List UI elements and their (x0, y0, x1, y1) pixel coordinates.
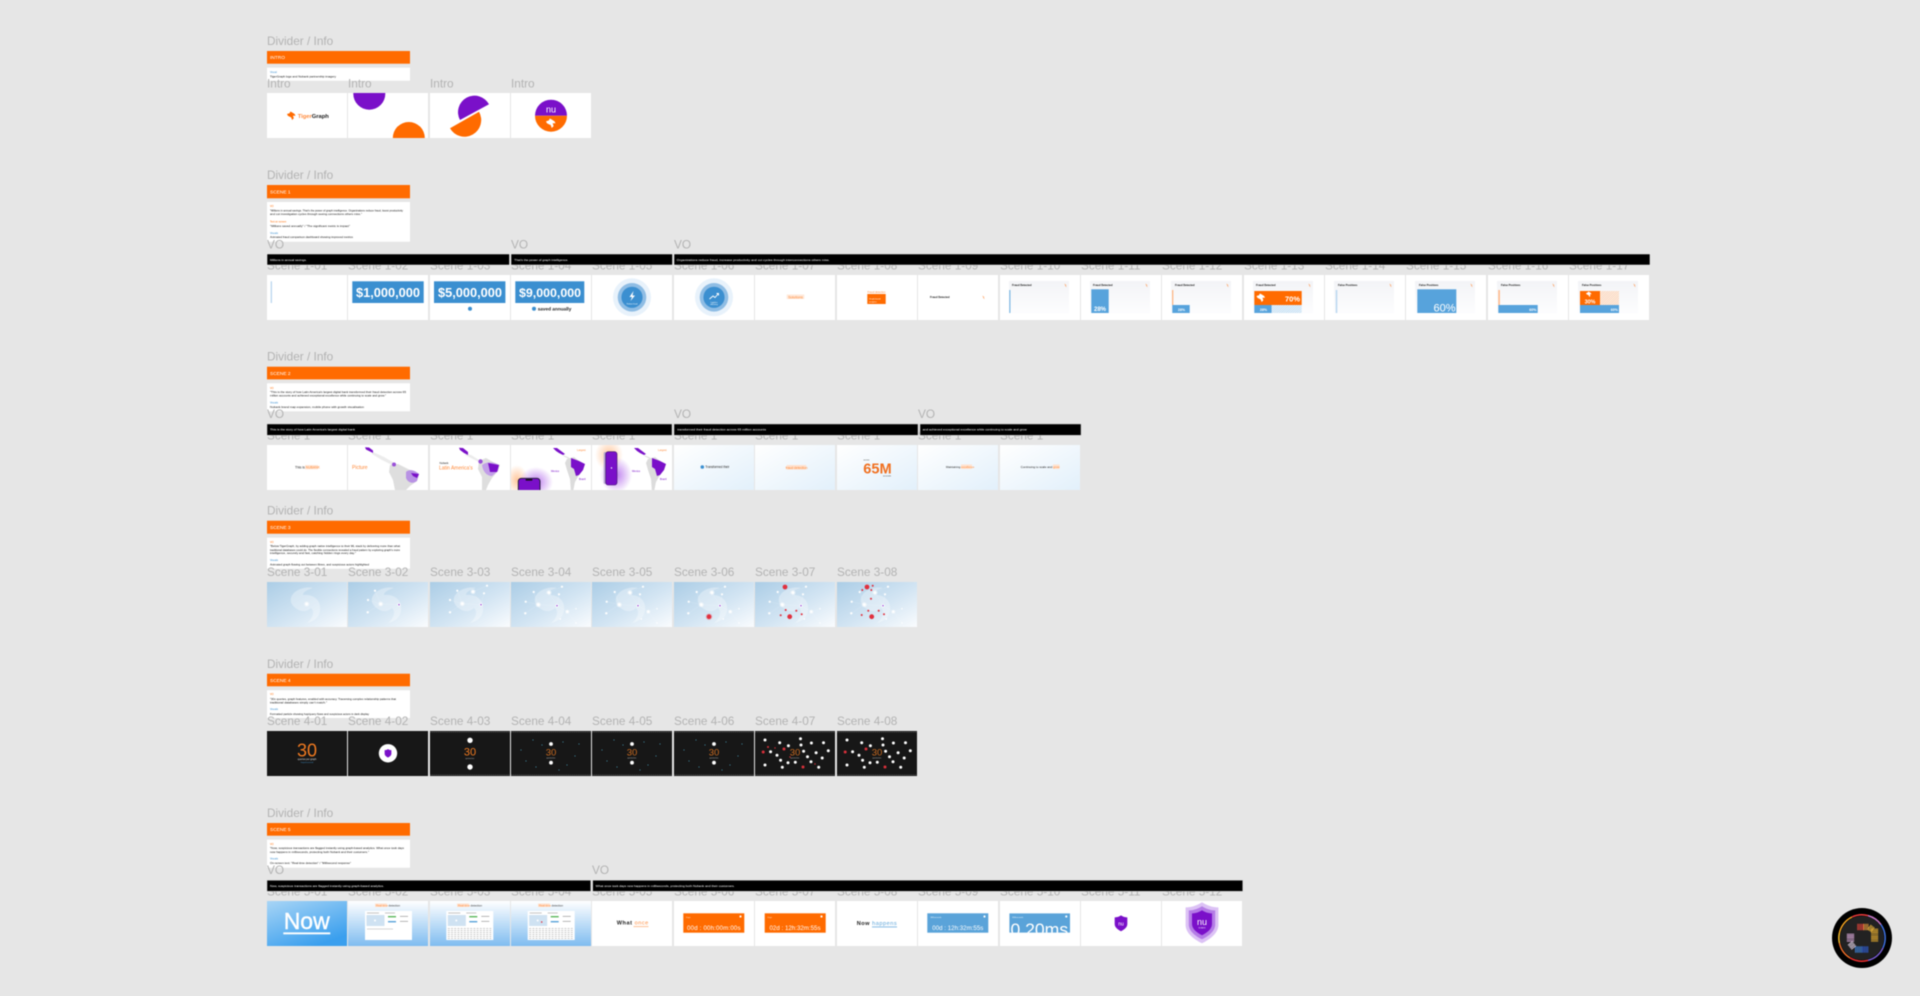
heading: divider info scene 4: Divider / Info (267, 657, 334, 671)
section: scene 3 (267, 504, 917, 627)
frame: TigerGraph logo: TigerGraph (298, 114, 329, 120)
frame 2-02: map closeup: Picture (352, 465, 368, 471)
frame 1-07: orange word: Solutions (788, 295, 803, 299)
frame 4-05: 30 with teal particles: queries/sec (627, 758, 637, 760)
frame: nu badge (511, 93, 591, 138)
info card: scene 1: VO (270, 205, 274, 208)
frame 4-03: 30 with two large nodes (430, 731, 510, 776)
frame 1-09: fraud detected heading: Fraud Detected (930, 295, 950, 299)
frame 1-11: chart 28 percent tall: Fraud Detected (1093, 283, 1113, 287)
frame 2-10: continuing to scale: Continuing to scale and grow (1021, 465, 1061, 469)
VO bar: flagged instantly: Now, suspicious transactions are flagged instantly using graph-based analytics. (270, 884, 384, 888)
frame 2-05: map phone center: Largest (658, 448, 667, 452)
frame 1-03: five million: $5,000,000 (438, 285, 502, 300)
VO labels: scene 2: VO (918, 407, 935, 421)
frame 1-12: chart 28 percent short: 28% (1178, 308, 1186, 312)
info card: scene 3 (267, 538, 410, 569)
frame 1-13: chart 70 percent: 70% (1285, 295, 1300, 304)
frame 5-04: real-time dashboard with table (511, 901, 591, 946)
frame 5-07: timer orange: Days (768, 917, 772, 919)
frame 2-06: transformed text (674, 445, 754, 490)
section: intro (267, 34, 591, 154)
frame 5-01: now (267, 901, 347, 946)
frame labels: scene 1: Scene 1-06 (674, 258, 735, 272)
VO bar: graph intelligence (511, 254, 672, 265)
frame 2-08: 65M (837, 445, 917, 490)
info card: scene 1: "Millions in annual savings. That's the power of graph intelligence. Organizations reduce fraud, boost productivity (270, 210, 404, 212)
frame labels: intro: Intro (430, 76, 454, 90)
banner: scene 5 (267, 823, 410, 836)
frame 1-16: chart 60 percent short: False Positives (1501, 283, 1521, 287)
frame 5-09: timer blue: 00d : 12h:32m:55s (932, 925, 983, 932)
frame labels: scene 2: Scene 1 (918, 428, 961, 442)
frame 3-05: full network (592, 582, 672, 627)
info card: scene 3: intelligence, securely and fast, catching hidden rings every day." (270, 552, 356, 555)
frame labels: scene 3: Scene 3-01 (267, 565, 327, 579)
frame 5-03: real-time dashboard with table (430, 901, 510, 946)
frame labels: intro: Intro (511, 76, 535, 90)
info card: scene 3: Visuals (270, 559, 279, 562)
VO bar: excellence: and achieved exceptional excellence while continuing to scale and grow (923, 428, 1027, 432)
frame labels: scene 4: Scene 4-02 (348, 714, 408, 728)
frame labels: scene 2: Scene 1 (592, 428, 635, 442)
heading: divider info scene 2: Divider / Info (267, 350, 334, 364)
info card: scene 4: VO (270, 693, 274, 696)
frame labels: scene 1: Scene 1-12 (1162, 258, 1222, 272)
info card: scene 4: Visuals (270, 708, 279, 711)
frame labels: scene 5: Scene 5-01 (267, 884, 327, 898)
info card: scene 3: traditional databases could do. The flexible connections revealed a fraud pattern by exploring graph's more (270, 549, 401, 552)
info card: scene 5: Visuals (270, 858, 279, 860)
frame 2-01: this is nubank (267, 445, 347, 490)
frame 1-04: nine million (511, 275, 591, 320)
VO bar: graph intelligence: That's the power of graph intelligence. (514, 258, 569, 262)
frame 4-03: 30 with two large nodes: 30 (464, 746, 476, 758)
frame labels: scene 2: Scene 1 (837, 428, 880, 442)
frame labels: scene 2: Scene 1 (430, 428, 473, 442)
frame 2-04: map phone rising: Largest (577, 448, 586, 452)
frame 1-04: nine million: saved annually (538, 306, 572, 311)
info card: scene 1: Text on screen (270, 221, 287, 224)
VO bar: flagged instantly (267, 880, 591, 891)
info card: scene 2 (267, 383, 410, 411)
frame 2-03: map latin america (430, 445, 510, 490)
frame labels: scene 1: Scene 1-15 (1406, 258, 1467, 272)
frame 5-08: now happens (837, 901, 917, 946)
info card: scene 5: On-screen text: "Real-time detection" / "Millisecond response" (270, 862, 351, 865)
VO bar: savings (267, 254, 510, 265)
frame labels: scene 1 (267, 258, 1629, 272)
frame labels: scene 3: Scene 3-07 (755, 565, 815, 579)
frame 2-02: map closeup (348, 445, 428, 490)
frame 1-01: empty bar (267, 275, 347, 320)
frame 4-01: 30 queries: queries per graph (298, 758, 317, 761)
VO bar: fraud detection: transformed their fraud detection across 65 million accounts (677, 428, 767, 432)
frame labels: scene 4: Scene 4-01 (267, 714, 327, 728)
frame 4-04: 30 with teal particles: 30 (546, 748, 556, 758)
frame labels: scene 1: Scene 1-10 (1000, 258, 1061, 272)
info card: scene 4 (267, 690, 410, 718)
info card: scene 2: "This is the story of how Latin America's largest digital bank transformed their fraud detection across 65 (270, 391, 407, 394)
frame labels: scene 3: Scene 3-03 (430, 565, 491, 579)
frame 1-06: growth icon rings: efficiency (710, 304, 718, 306)
frame labels: scene 5: Scene 5-07 (755, 884, 815, 898)
frame 4-06: 30 with teal particles (674, 731, 754, 776)
frame 3-03: eight nodes (430, 582, 510, 627)
frame labels: scene 5: Scene 5-10 (1000, 884, 1061, 898)
section: scene 4 (267, 657, 917, 776)
info card: scene 2: Visuals (270, 402, 279, 404)
banner: scene 1 (267, 185, 410, 198)
info card: scene 1: Animated fraud comparison dashboard showing improved metrics (270, 236, 354, 239)
frame 5-02: real-time dashboard: Real-time detection (376, 904, 400, 908)
banner: scene 2: SCENE 2 (270, 371, 291, 377)
frame labels: scene 3: Scene 3-05 (592, 565, 653, 579)
info card: scene 1 (267, 202, 410, 242)
frame labels: scene 4: Scene 4-05 (592, 714, 653, 728)
frame labels: scene 5: Scene 5-06 (674, 884, 735, 898)
heading: divider info scene 1: Divider / Info (267, 168, 334, 182)
frame 2-09: maintaining excellence (918, 445, 998, 490)
frame 1-09: fraud detected heading (918, 275, 998, 320)
frame 2-08: 65M: 65M (863, 462, 892, 478)
frame 1-05: fraud icon rings (592, 275, 672, 320)
frame labels: scene 4: Scene 4-03 (430, 714, 491, 728)
frame 4-08: 30 with dot field: 30 (872, 748, 882, 758)
info card: scene 4: Formatted particle showing hop/query flows and suspicious actors in dark display (270, 713, 370, 716)
frame labels: scene 3: Scene 3-02 (348, 565, 408, 579)
frame labels: scene 5: Scene 5-08 (837, 884, 898, 898)
frame labels: scene 2: Scene 1 (1000, 428, 1043, 442)
info card: scene 5 (267, 840, 410, 868)
frame 2-01: this is nubank: This is NUBANK (295, 465, 321, 469)
frame 5-07: timer orange (755, 901, 835, 946)
frame labels: scene 4 (267, 714, 898, 728)
frame 5-10: 0.20ms: 0.20ms (1010, 920, 1068, 940)
frame 4-05: 30 with teal particles: 30 (627, 748, 637, 758)
frame 5-09: timer blue: Milliseconds (930, 917, 941, 919)
frame 1-17: chart 30 and 60 percent: 30% (1585, 300, 1596, 306)
frame 2-09: maintaining excellence: Maintaining excellence (946, 465, 975, 469)
frame labels: scene 5: Scene 5-04 (511, 884, 572, 898)
frame 2-03: map latin america: Latin America's (439, 466, 473, 472)
frame labels: scene 3 (267, 565, 898, 579)
frame 1-08: orange callout: analytics (869, 300, 877, 303)
frame 5-07: timer orange: 02d : 12h:32m:55s (770, 925, 820, 932)
frame labels: scene 1: Scene 1-08 (837, 258, 898, 272)
frame 5-11: small shield: nu (1118, 921, 1124, 927)
info card: scene 4: traditional databases simply can't match." (270, 702, 327, 704)
frame labels: scene 1: Scene 1-16 (1488, 258, 1549, 272)
info card: scene 3: VO (270, 541, 274, 544)
info card: scene 3: Animated graph flowing out between fibres, and suspicious actors highlighted (270, 564, 370, 566)
frame labels: scene 4: Scene 4-06 (674, 714, 735, 728)
banner: intro (267, 51, 410, 64)
frame: nu badge: nu (546, 104, 556, 114)
frame: TigerGraph logo (267, 93, 347, 138)
frame 4-04: 30 with teal particles (511, 731, 591, 776)
frame 4-02: shield spotlight (348, 731, 428, 776)
banner: scene 2 (267, 367, 410, 379)
VO bar: savings: Millions in annual savings. (270, 258, 307, 262)
frame 5-01: now: Now (284, 908, 330, 934)
VO labels: scene 1: VO (267, 238, 284, 252)
frame 5-03: real-time dashboard with table: Real-time detection (458, 904, 482, 908)
frame 2-08: 65M: accounts (883, 474, 891, 478)
frame 5-06: timer zero: 00d : 00h:00m:00s (687, 925, 741, 932)
frame labels: scene 1: Scene 1-04 (511, 258, 572, 272)
frame 5-10: 0.20ms: Milliseconds (1012, 917, 1023, 919)
frame: two circles (348, 92, 428, 139)
info card: scene 4: "30x queries, graph features, enabled with accuracy. Traversing complex relationship patterns that (270, 698, 396, 701)
frame 2-10: continuing to scale (1000, 445, 1080, 490)
frame 5-09: timer blue (918, 901, 998, 946)
frame 4-01: 30 queries: 30 (297, 741, 317, 761)
info card: intro: TigerGraph logo and Nubank partnership imagery (270, 76, 337, 78)
frame labels: intro: Intro (348, 76, 372, 90)
frame 2-04: map phone rising (511, 445, 591, 491)
frame 1-17: chart 30 and 60 percent: False Positives (1582, 283, 1602, 287)
frame labels: scene 1: Scene 1-03 (430, 258, 491, 272)
frame labels: scene 5: Scene 5-11 (1081, 884, 1140, 898)
frame 1-08: orange callout: Graph-based (869, 299, 881, 301)
frame labels: scene 1: Scene 1-17 (1569, 258, 1629, 272)
info card: scene 1: and cut investigation cycles through seeing connections others miss." (270, 213, 362, 216)
info card: scene 1: "Millions saved annually" / "The significant metric is impact" (270, 225, 350, 228)
frame 2-04: map phone rising: Mexico (551, 469, 560, 473)
info card: scene 5: "Now, suspicious transactions are flagged instantly using graph-based analytics. What once took days (270, 847, 405, 850)
VO bar: what once took days: What once took days now happens in milliseconds, protecting both Nubank and their customers. (596, 884, 735, 888)
frame 3-01: single node (266, 582, 347, 627)
frame 5-08: now happens: Now happens (857, 921, 897, 927)
frame 1-13: chart 70 percent: 28% (1260, 308, 1268, 312)
frame 2-05: map phone center: Brazil (660, 477, 667, 481)
frame 1-07: orange word (755, 275, 835, 320)
frame 1-03: five million (430, 275, 510, 320)
frame labels: intro (267, 76, 535, 90)
frame 3-08: network many red nodes (836, 582, 917, 627)
frame labels: scene 3: Scene 3-04 (511, 565, 572, 579)
frame labels: scene 1: Scene 1-01 (267, 258, 327, 272)
VO labels: scene 2: VO (674, 407, 691, 421)
VO labels: scene 1: VO (674, 238, 691, 252)
frame: half discs (430, 93, 510, 138)
frame 1-14: false positives axis: False Positives (1338, 283, 1358, 287)
banner: scene 4 (267, 674, 410, 686)
frame 1-06: growth icon rings (674, 275, 754, 320)
frame 1-17: chart 30 and 60 percent: 60% (1611, 308, 1619, 312)
VO bar: fraud detection (674, 424, 918, 435)
frame labels: scene 1: Scene 1-14 (1325, 258, 1386, 272)
frame 5-05: what once (592, 901, 672, 946)
frame labels: scene 5: Scene 5-03 (430, 884, 491, 898)
frame 5-06: timer zero: Days (686, 917, 691, 919)
frame 4-06: 30 with teal particles: 30 (709, 748, 719, 758)
frame 5-06: timer zero (674, 901, 754, 946)
VO bar: excellence (920, 424, 1081, 435)
info card: scene 1: Visuals (270, 232, 279, 235)
VO labels: scene 2: VO (267, 407, 284, 421)
frame 2-05: map phone center (592, 445, 672, 490)
banner: scene 5: SCENE 5 (270, 827, 291, 833)
frame labels: scene 1: Scene 1-07 (755, 258, 815, 272)
frame 1-08: orange callout (837, 275, 917, 320)
frame 4-01: 30 queries (266, 730, 348, 777)
frame 2-07: fraud detection text (754, 445, 835, 490)
frame 4-07: 30 with dot field: 30 (790, 748, 800, 758)
frame 1-02: one million: $1,000,000 (356, 285, 420, 300)
banner: scene 3: SCENE 3 (270, 525, 291, 531)
heading: divider info scene 5: Divider / Info (267, 806, 334, 820)
frame 1-11: chart 28 percent tall (1081, 275, 1161, 320)
frame labels: scene 1: Scene 1-09 (918, 258, 978, 272)
info card: intro (267, 68, 410, 81)
frame 5-02: real-time dashboard (348, 901, 428, 946)
banner: intro: INTRO (270, 55, 285, 61)
VO labels: scene 1: VO (511, 238, 528, 252)
VO bar: story: This is the story of how Latin America's largest digital bank (270, 428, 356, 432)
frame 1-15: chart 60 percent tall: 60% (1433, 302, 1456, 314)
VO bar: what once took days (593, 880, 1243, 891)
frame labels: scene 2: Scene 1 (511, 428, 554, 442)
VO labels: scene 2 (267, 407, 935, 421)
VO labels: scene 1 (267, 238, 691, 252)
frame labels: scene 1: Scene 1-13 (1244, 258, 1305, 272)
frame 1-10: chart empty blue axis: Fraud Detected (1012, 283, 1032, 287)
frame 1-13: chart 70 percent (1244, 275, 1324, 320)
badge: circular logo bottom right (1832, 908, 1892, 968)
info card: scene 2: Nubank brand map expansion, mobile phone with growth visualisation (270, 406, 365, 409)
info card: scene 5: VO (270, 843, 274, 846)
banner: scene 3 (267, 521, 410, 534)
heading: divider info scene 3: Divider / Info (267, 504, 334, 518)
frame 2-05: map phone center: Mexico (632, 469, 641, 473)
info card: scene 2: VO (270, 387, 274, 390)
frame 3-06: network one red node (674, 582, 754, 627)
frame labels: scene 2: Scene 1 (267, 428, 310, 442)
frame 4-04: 30 with teal particles: queries/sec (546, 758, 556, 760)
frame labels: scene 2 (267, 428, 1043, 442)
frame 5-05: what once: What once (617, 920, 648, 926)
frame 3-07: network red nodes spreading (754, 582, 835, 627)
frame labels: scene 2: Scene 1 (348, 428, 391, 442)
info card: scene 2: million accounts and achieved exceptional excellence while continuing to scale and grow." (270, 394, 386, 398)
frame labels: scene 5: Scene 5-09 (918, 884, 978, 898)
frame 4-08: 30 with dot field (837, 731, 917, 776)
info card: intro: Visual (270, 71, 277, 74)
frame labels: scene 4: Scene 4-08 (837, 714, 898, 728)
banner: scene 4: SCENE 4 (270, 678, 291, 684)
frame 1-12: chart 28 percent short: Fraud Detected (1175, 283, 1195, 287)
frame labels: scene 5: Scene 5-02 (348, 884, 408, 898)
frame 1-12: chart 28 percent short (1162, 275, 1242, 320)
frame 1-02: one million (348, 275, 428, 320)
frame 4-08: 30 with dot field: queries/sec (872, 758, 882, 760)
frame labels: scene 4: Scene 4-04 (511, 714, 572, 728)
frame labels: scene 5 (267, 884, 1222, 898)
section: scene 5 (267, 806, 1243, 946)
frame 2-04: map phone rising: Brazil (579, 477, 586, 481)
frame 1-06: growth icon rings: Logistics (710, 301, 718, 304)
VO labels: scene 5: VO (592, 863, 609, 877)
frame 4-05: 30 with teal particles (592, 731, 672, 776)
frame labels: scene 1: Scene 1-02 (348, 258, 408, 272)
frame 1-05: fraud icon rings: Reduce fraud (627, 304, 637, 306)
frame 1-04: nine million: $9,000,000 (519, 286, 581, 300)
frame labels: scene 2: Scene 1 (674, 428, 717, 442)
frame 1-16: chart 60 percent short: 60% (1529, 308, 1537, 312)
frame 1-15: chart 60 percent tall: False Positives (1419, 283, 1439, 287)
frame 4-07: 30 with dot field: queries/sec (790, 758, 800, 760)
VO labels: scene 5: VO (267, 863, 284, 877)
frame labels: scene 1: Scene 1-11 (1081, 258, 1140, 272)
heading: divider info intro: Divider / Info (267, 34, 334, 48)
frame 1-16: chart 60 percent short (1488, 275, 1568, 320)
frame labels: scene 4: Scene 4-07 (755, 714, 815, 728)
VO bar: organizations: Organizations reduce fraud, increase productivity and cut cycles through interconnections others miss. (677, 258, 830, 262)
frame 2-06: transformed text: Transformed their (705, 465, 730, 469)
frame 4-01: 30 queries: hops/second (301, 762, 314, 764)
frame 1-13: chart 70 percent: Fraud Detected (1256, 283, 1276, 287)
frame 2-03: map latin america: Nubank (440, 461, 449, 465)
frame 1-11: chart 28 percent tall: 28% (1094, 307, 1107, 313)
frame 5-12: large layered shield (1162, 901, 1242, 946)
frame 5-12: large layered shield: nu (1197, 917, 1207, 927)
frame labels: scene 1: Scene 1-05 (592, 258, 653, 272)
VO bar: story (267, 424, 672, 435)
frame 5-11: small shield (1081, 901, 1161, 946)
frame labels: scene 2: Scene 1 (755, 428, 798, 442)
frame labels: scene 5: Scene 5-05 (592, 884, 653, 898)
frame 4-07: 30 with dot field (755, 731, 835, 776)
frame 1-14: false positives axis (1325, 275, 1405, 320)
frame labels: intro: Intro (267, 76, 291, 90)
frame labels: scene 3: Scene 3-08 (837, 565, 898, 579)
frame 1-17: chart 30 and 60 percent (1569, 275, 1649, 320)
banner: scene 1: SCENE 1 (270, 189, 291, 195)
frame 1-15: chart 60 percent tall (1406, 275, 1486, 320)
frame 3-04: full network (510, 582, 591, 627)
frame labels: scene 5: Scene 5-12 (1162, 884, 1222, 898)
frame labels: scene 3: Scene 3-06 (674, 565, 735, 579)
frame 1-08: orange callout: Fraud detection (867, 290, 886, 294)
info card: scene 5: now happens in milliseconds, protecting both Nubank and their customers." (270, 851, 369, 854)
info card: scene 3: "Below TigerGraph, by adding graph native intelligence to their ML stack by delivering more than what (270, 545, 400, 548)
frame 4-03: 30 with two large nodes: queries/sec (465, 758, 475, 760)
frame 4-06: 30 with teal particles: queries/sec (709, 758, 719, 760)
frame 5-10: 0.20ms (1000, 901, 1080, 946)
frame 3-02: five nodes (348, 582, 428, 627)
VO bar: organizations (674, 254, 1650, 265)
frame 1-10: chart empty blue axis (1000, 275, 1080, 320)
frame 2-08: 65M: across (864, 460, 869, 462)
VO labels: scene 5 (267, 863, 609, 877)
frame 5-04: real-time dashboard with table: Real-time detection (539, 904, 563, 908)
section: scene 2 (267, 350, 1081, 498)
frame 5-12: large layered shield: NUBANK (1198, 926, 1206, 930)
section: scene 1 (267, 168, 1650, 320)
frame 2-07: fraud detection text: fraud detection (786, 466, 808, 470)
